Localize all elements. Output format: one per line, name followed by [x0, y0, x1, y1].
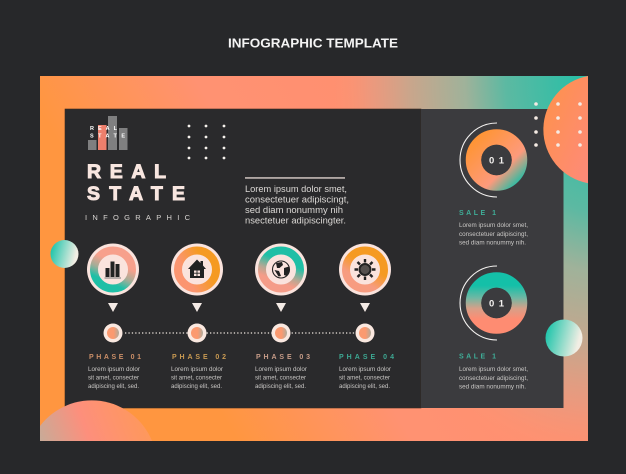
label: PHASE 03: [256, 354, 310, 361]
description: Lorem ipsum dolor: [255, 366, 308, 373]
panel: sales side: [421, 109, 564, 408]
sale 2 donut: 01: [489, 298, 505, 310]
description: adipiscing elit, sed.: [88, 383, 139, 390]
description: sit amet, consecter: [88, 374, 140, 382]
description: Lorem ipsum dolor: [171, 366, 224, 373]
sale 1 donut: 01: [489, 156, 505, 166]
icon: chart badge: [87, 244, 139, 296]
heading: real state: [87, 161, 185, 205]
description: [88, 366, 141, 390]
sale 1 description: consectetuer adipiscingt,: [459, 231, 528, 238]
timeline node: [104, 324, 122, 342]
heading: real state: STATE: [87, 183, 185, 205]
intro text block: [245, 177, 349, 226]
intro text block: Lorem ipsum dolor smet,: [245, 184, 347, 194]
description: [255, 366, 308, 390]
description: sit amet, consecter: [171, 374, 223, 382]
label: PHASE 04: [339, 354, 394, 361]
icon: gear badge: [339, 244, 391, 296]
sale 1 label: SALE 1: [459, 210, 496, 217]
panel: main dark: [65, 109, 421, 408]
description: Lorem ipsum dolor: [339, 366, 392, 373]
heading: real state: REAL: [87, 161, 166, 183]
timeline node: [356, 324, 374, 342]
description: adipiscing elit, sed.: [339, 383, 390, 390]
timeline node: [188, 324, 206, 342]
pointer: [108, 303, 118, 312]
description: [171, 366, 224, 390]
sale 1 description: Lorem ipsum dolor smet,: [459, 222, 528, 229]
decorative half circle: bottom left: [40, 400, 152, 441]
phase 2: [171, 244, 226, 390]
logo: building bars: REAL: [90, 126, 118, 132]
timeline node: [272, 324, 290, 342]
pointer: [360, 303, 370, 312]
description: sit amet, consecter: [339, 374, 391, 382]
decorative circle: top right: [543, 76, 588, 183]
sale 1 description: [459, 222, 528, 246]
title: INFOGRAPHIC TEMPLATE: [228, 36, 398, 50]
pointer: [276, 303, 286, 312]
sale 1 donut: [460, 123, 520, 197]
sale 1 description: sed diam nonummy nih.: [459, 240, 526, 246]
description: adipiscing elit, sed.: [171, 383, 222, 390]
sale 2 description: [459, 366, 528, 390]
sale 2 label: SALE 1: [459, 354, 496, 360]
intro text block: nsectetuer adipiscingter.: [245, 216, 346, 226]
sale 2 description: consectetuer adipiscingt,: [459, 375, 528, 382]
icon: house badge: [171, 244, 223, 296]
description: sit amet, consecter: [255, 374, 307, 382]
label: PHASE 02: [172, 354, 226, 361]
sale 2 description: Lorem ipsum dolor smet,: [459, 366, 528, 373]
phase 1: [87, 244, 141, 390]
gradient frame: [40, 76, 588, 441]
sale 2 donut: [460, 266, 520, 340]
dot grid: header: [188, 125, 225, 159]
phase 4: [339, 244, 394, 390]
timeline dotted line: [125, 332, 356, 334]
description: adipiscing elit, sed.: [255, 383, 306, 390]
description: [339, 366, 392, 390]
logo: building bars: STATE: [90, 134, 125, 140]
logo: building bars: [88, 116, 128, 150]
intro text block: sed diam nonummy nih: [245, 205, 343, 215]
phase 3: [255, 244, 310, 390]
icon: globe badge: [255, 244, 307, 296]
decorative circle: left mint: [50, 240, 78, 268]
intro text block: consectetuer adipiscingt,: [245, 194, 349, 204]
label: PHASE 01: [89, 354, 141, 361]
subheading: infographic: INFOGRAPHIC: [85, 213, 191, 222]
decorative circle: right mint: [546, 320, 582, 356]
dot grid: top right: [534, 102, 582, 147]
sale 2 description: sed diam nonummy nih.: [459, 384, 526, 390]
pointer: [192, 303, 202, 312]
description: Lorem ipsum dolor: [88, 366, 141, 373]
